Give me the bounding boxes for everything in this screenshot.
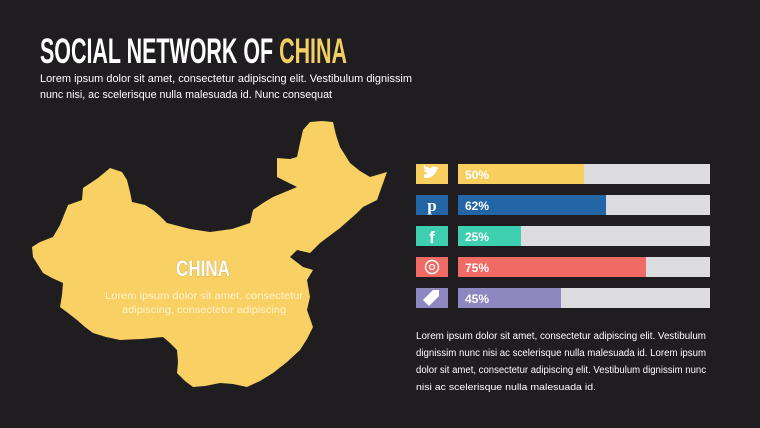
bar: tag 45%	[416, 288, 710, 308]
bar: tag 45%: 45%	[465, 292, 489, 306]
bar chart	[416, 164, 710, 308]
bar: twitter 50%: 50%	[465, 168, 489, 182]
body text: nisi ac scelerisque nulla malesuada id.	[416, 382, 596, 393]
bar: facebook 25%	[416, 226, 710, 247]
body text: Lorem ipsum dolor sit amet, consectetur adipiscing elit. Vestibulum	[416, 331, 706, 342]
title: SOCIAL NETWORK OF CHINA	[40, 32, 347, 71]
intro paragraph: Lorem ipsum dolor sit amet, consectetur adipiscing elit. Vestibulum dignissim	[40, 73, 412, 85]
body text: dignissim nunc nisi ac scelerisque nulla malesuada id. Lorem ipsum	[416, 348, 706, 359]
bar: instagram 75%	[416, 257, 710, 277]
bar: pinterest 62%: 62%	[465, 199, 489, 213]
bar: instagram 75%: 75%	[465, 261, 489, 275]
intro paragraph	[40, 73, 412, 101]
map label: CHINA	[176, 256, 230, 281]
bar: facebook 25%: f	[429, 228, 435, 247]
bar: facebook 25%: 25%	[465, 230, 489, 244]
intro paragraph: nunc nisi, ac scelerisque nulla malesuada id. Nunc consequat	[40, 89, 332, 101]
map text: Lorem ipsum dolor sit amet, consectetur	[105, 290, 304, 302]
body text	[416, 331, 706, 393]
body text: dolor sit amet, consectetur adipiscing elit. Vestibulum dignissim nunc	[416, 365, 706, 376]
bar: twitter 50%	[416, 164, 710, 184]
map: China	[32, 121, 387, 387]
bar: pinterest 62%: p	[427, 196, 437, 215]
bar: pinterest 62%	[416, 195, 710, 215]
map: China: adipiscing, consectetur adipiscing	[122, 304, 286, 316]
